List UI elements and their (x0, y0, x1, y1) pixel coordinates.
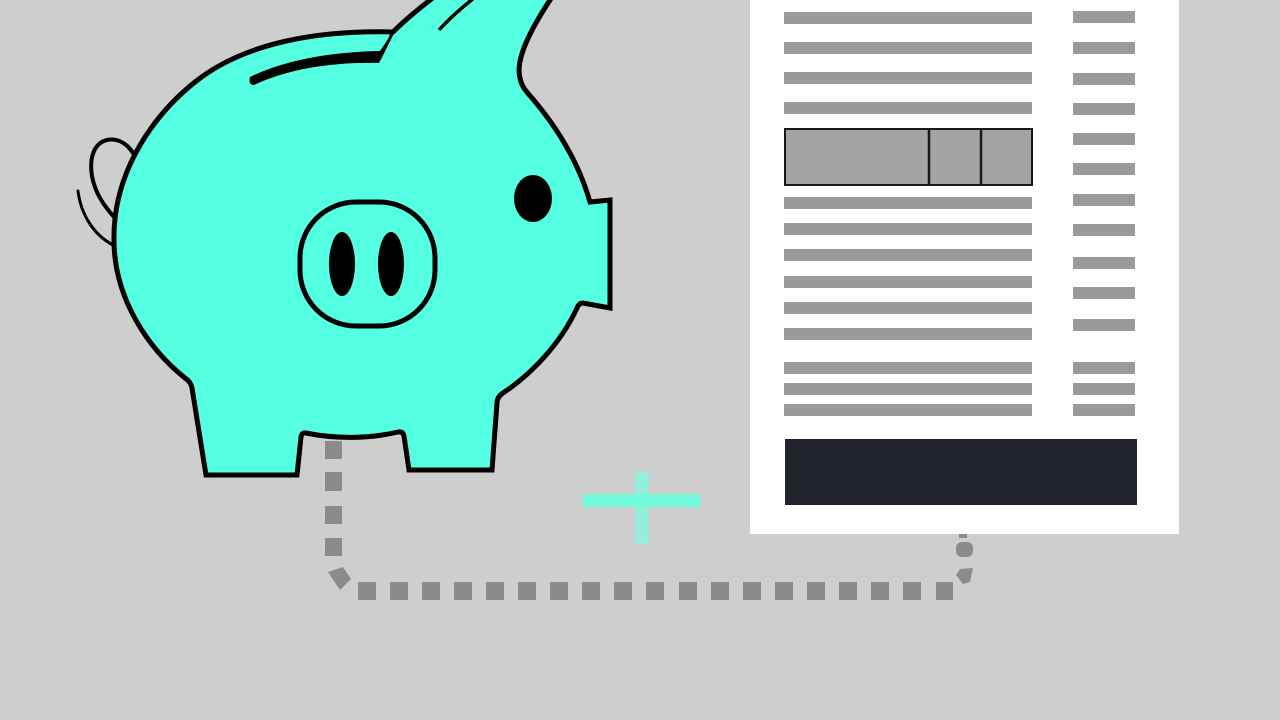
eye (514, 175, 552, 222)
side column lines (1073, 11, 1135, 416)
icon: piggy bank tail (78, 140, 133, 245)
snout (300, 202, 435, 326)
dark footer bar (785, 439, 1137, 505)
dotted connector (325, 441, 973, 600)
right nostril (378, 232, 404, 296)
document sheet (750, 0, 1179, 534)
highlighted table row (785, 129, 1032, 185)
icon: plus sign (583, 472, 700, 544)
main text lines (784, 12, 1032, 416)
icon: piggy bank (114, 0, 610, 475)
left nostril (329, 232, 355, 296)
coin slot notch (379, 32, 393, 60)
ear line (439, 0, 474, 30)
panel: document (750, 0, 1179, 534)
pig body (114, 0, 610, 475)
coin slot (250, 32, 393, 85)
